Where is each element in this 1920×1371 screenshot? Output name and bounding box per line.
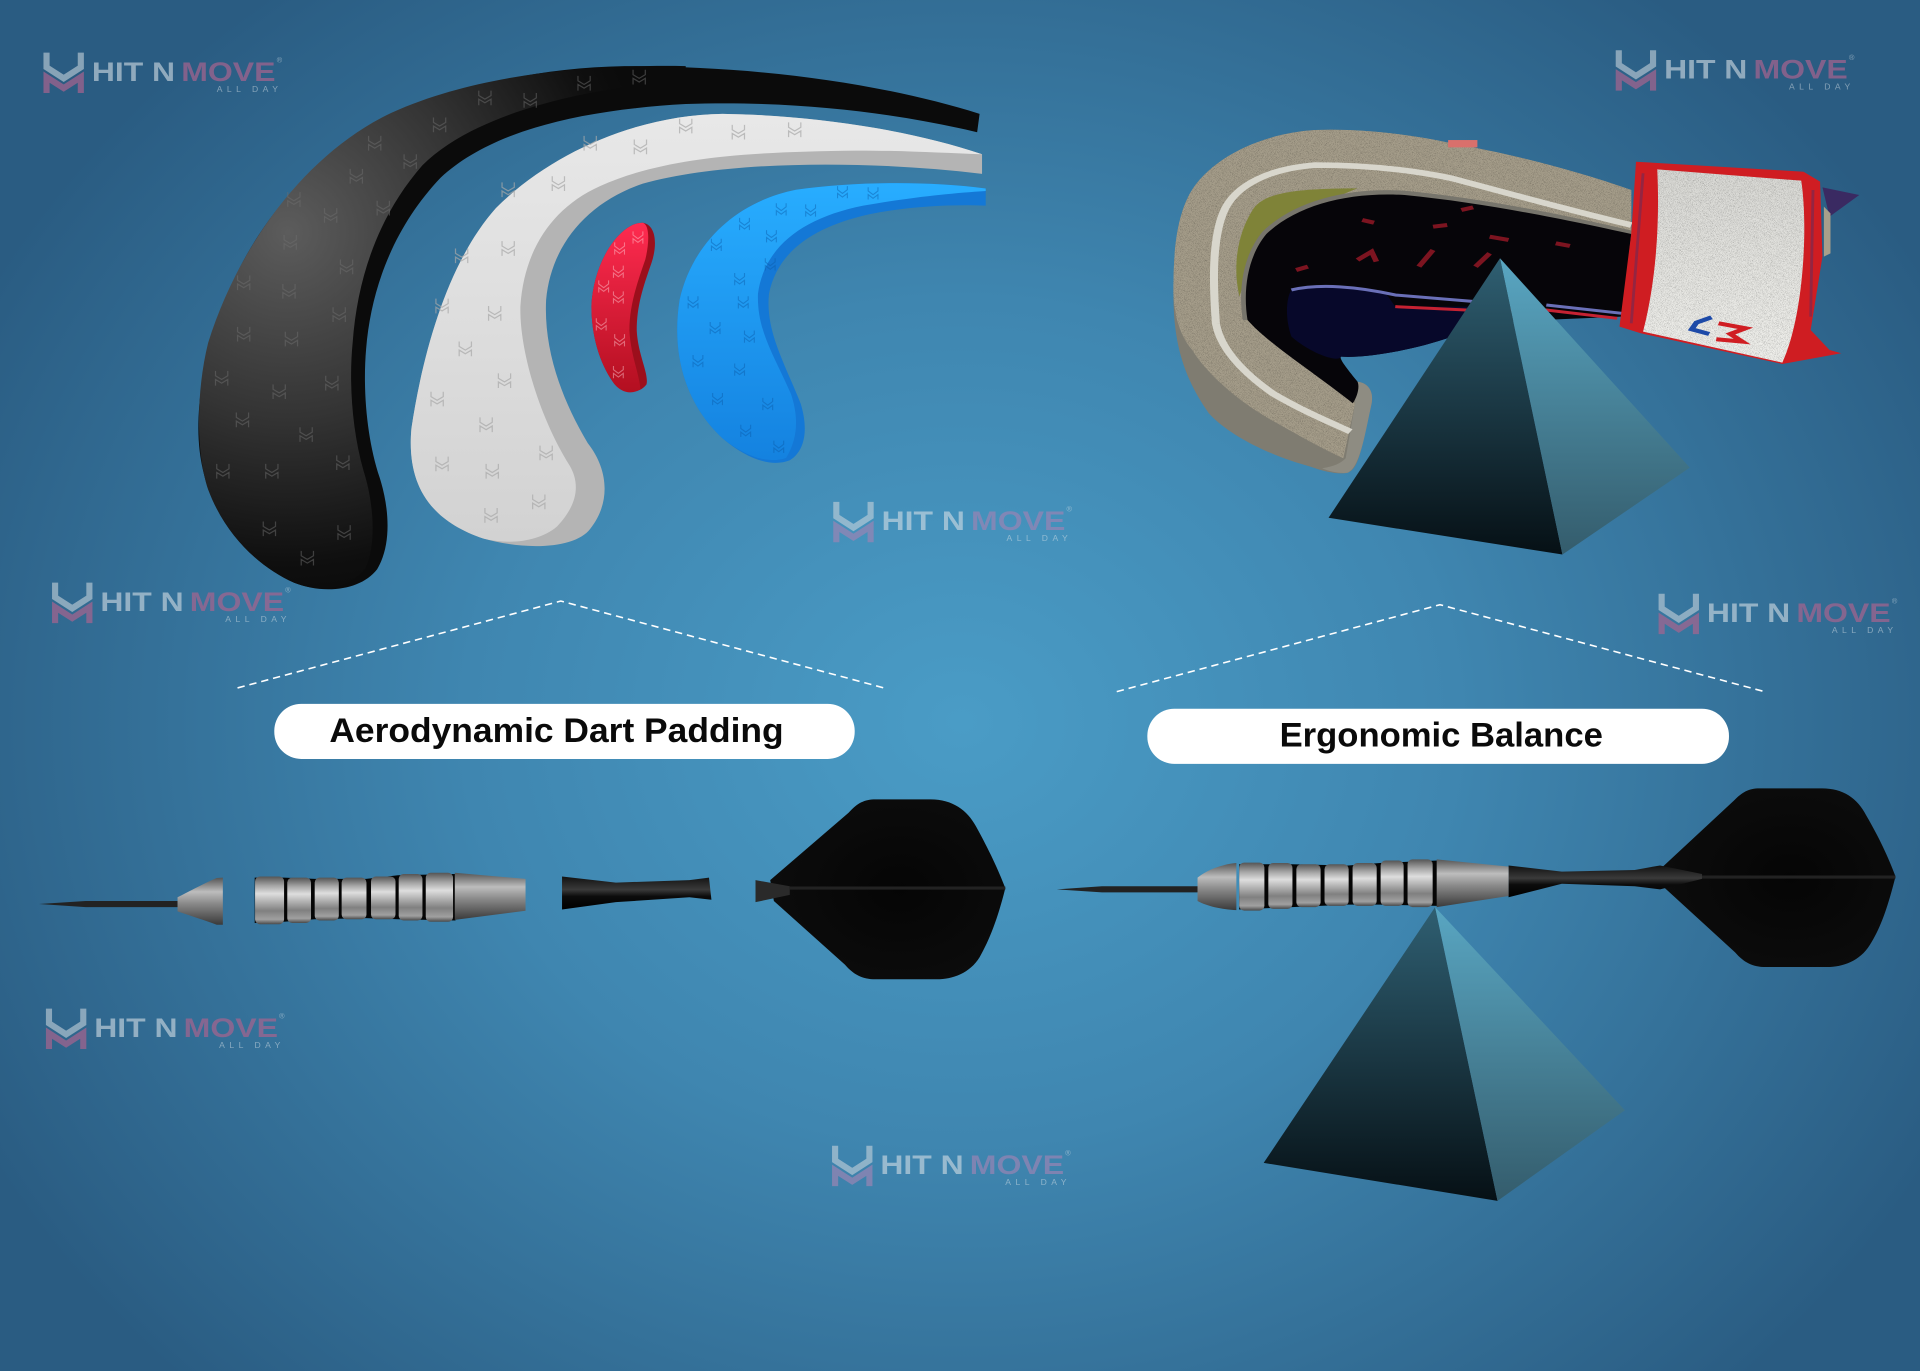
black outer padding layer [198, 66, 980, 589]
watermark logo: left middle: ® [285, 585, 291, 594]
watermark logo: top left [47, 53, 283, 94]
glove lip [1322, 382, 1372, 473]
exploded dart [39, 799, 1005, 979]
pyramid under dart [1264, 907, 1625, 1201]
watermark logo: centre lower: ® [1065, 1149, 1071, 1158]
watermark logo: centre upper: ALL DAY [1007, 533, 1068, 543]
watermark logo: right middle: MOVE [1796, 598, 1891, 628]
watermark logo: top right [1619, 50, 1855, 91]
cuff side strip [1824, 207, 1830, 257]
assembled dart shaft [1509, 865, 1702, 897]
watermark logo: top left: HIT N [92, 57, 175, 87]
assembled dart on pyramid [1057, 788, 1896, 1201]
watermark logo: centre upper: HIT N [882, 506, 965, 536]
watermark logo: centre lower: HIT N [880, 1150, 964, 1180]
dart shaft [562, 876, 711, 910]
watermark logo: left lower: MOVE [184, 1013, 278, 1043]
dart flight [756, 799, 1005, 979]
glove red tag [1448, 140, 1477, 147]
white foam padding layer [411, 114, 982, 546]
watermark logo: right middle: ALL DAY [1832, 625, 1893, 635]
cuff wing [1822, 187, 1859, 217]
watermark logo: top right: ® [1849, 53, 1855, 62]
red insert padding layer [591, 223, 655, 392]
glove frayed edge [1245, 193, 1631, 320]
glove red interior motifs [1296, 207, 1570, 270]
glove white liner [1214, 165, 1631, 432]
watermark logo: top left: MOVE [181, 57, 276, 87]
dashed bracket: right [1117, 605, 1764, 692]
watermark logo: centre upper: ® [1067, 505, 1073, 514]
watermark logo: right middle [1662, 594, 1898, 635]
dart nose cone [178, 878, 223, 925]
heading pill: Ergonomic Balance [1147, 709, 1729, 764]
assembled dart flight [1663, 788, 1896, 967]
watermark logo: left lower [49, 1009, 285, 1050]
glove blue seam [1291, 286, 1622, 313]
glove cross-section [1173, 130, 1859, 473]
padding layers exploded illustration [198, 66, 986, 589]
cuff binding streaks [1631, 173, 1813, 323]
watermark logo: centre lower: ALL DAY [1005, 1177, 1067, 1187]
watermark logo: centre upper: MOVE [971, 506, 1065, 536]
dashed bracket: left [238, 601, 884, 688]
cuff white band [1643, 169, 1804, 363]
assembled dart needle [1057, 886, 1198, 892]
watermark logo: centre lower: MOVE [970, 1150, 1064, 1180]
glove olive lining [1236, 188, 1357, 297]
watermark logo: left lower: ALL DAY [219, 1040, 281, 1050]
glove foam layer [1173, 130, 1631, 458]
cuff logo mark [1692, 317, 1746, 342]
watermark logo: left middle: HIT N [100, 587, 184, 617]
watermark logo: centre lower [835, 1146, 1071, 1187]
watermark logo: left middle [55, 583, 291, 624]
assembled dart barrel [1198, 859, 1509, 911]
blue gel padding layer [677, 183, 986, 463]
heading pill: Aerodynamic Dart Padding [274, 704, 855, 759]
heading pill: Ergonomic Balance: Ergonomic Balance [1280, 717, 1603, 755]
dart needle [39, 901, 178, 907]
watermark logo: top left: ® [277, 55, 283, 64]
watermark logo: top right: ALL DAY [1789, 81, 1850, 91]
watermark logo: top left: ALL DAY [217, 84, 278, 94]
glove navy inner layer [1287, 286, 1471, 359]
glove dark interior [1246, 195, 1631, 403]
watermark logo: left middle: ALL DAY [225, 614, 287, 624]
heading pill: Aerodynamic Dart Padding: Aerodynamic Dart Padding [329, 712, 784, 750]
watermark logo: right middle: ® [1892, 596, 1898, 605]
glove red strip [1395, 307, 1617, 318]
boxing glove cross-section on pyramid [1173, 130, 1859, 555]
watermark logo: top right: MOVE [1753, 54, 1848, 84]
dart barrel [255, 873, 526, 924]
watermark logo: left lower: ® [279, 1011, 285, 1020]
watermark logo: left lower: HIT N [94, 1013, 178, 1043]
cuff red binding [1619, 162, 1841, 364]
watermark logo: centre upper [836, 502, 1073, 543]
watermark logo: right middle: HIT N [1707, 598, 1790, 628]
pyramid under glove [1329, 258, 1690, 555]
watermark logo: top right: HIT N [1664, 54, 1747, 84]
watermark logo: left middle: MOVE [190, 587, 284, 617]
glove outer shell [1173, 130, 1631, 473]
